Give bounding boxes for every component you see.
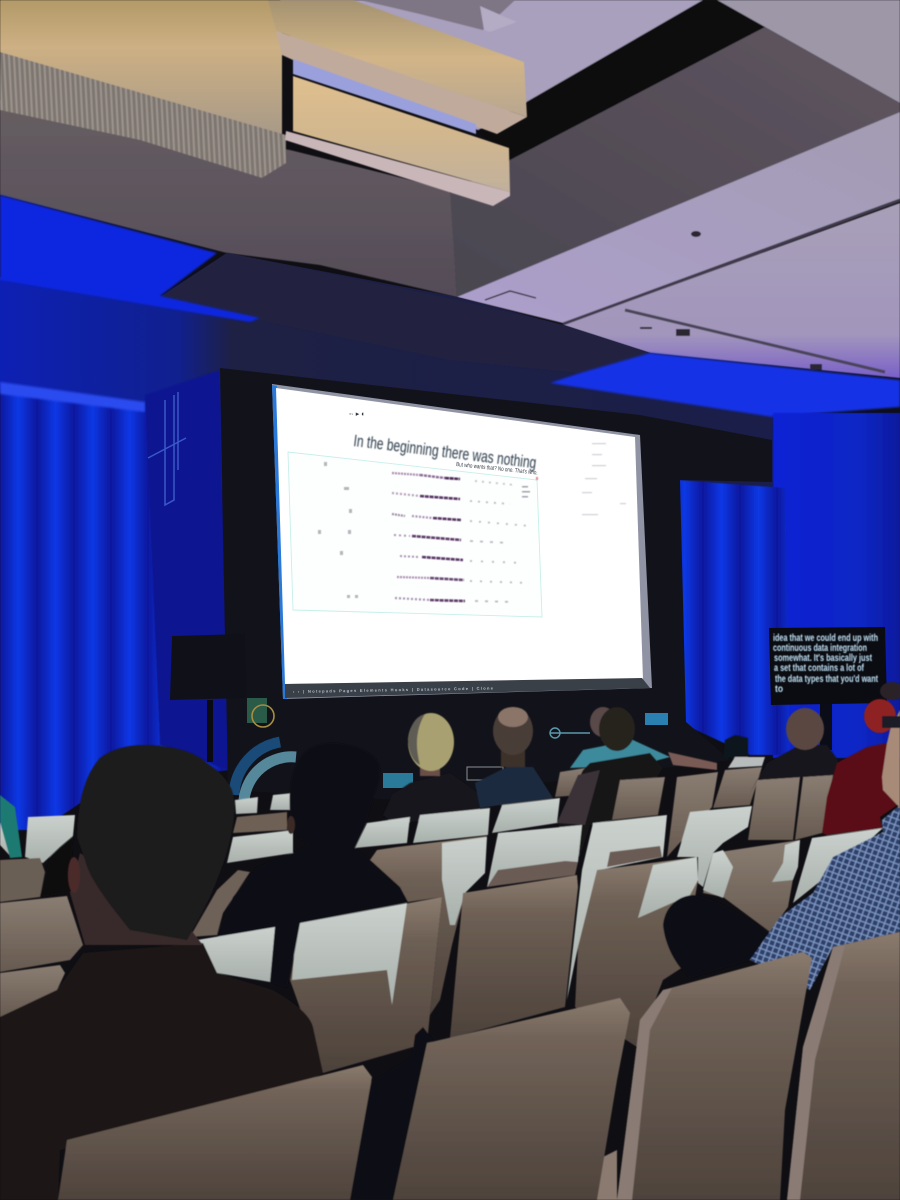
row 5 lit seats [0, 793, 560, 863]
person: dark vest [557, 707, 663, 857]
front seat 3 side highlight [617, 988, 672, 1200]
seat [413, 808, 490, 843]
slide subtitle: But who wants that? No one. That's who. [456, 462, 538, 477]
front seat 4 side highlight [787, 945, 845, 1200]
head [590, 707, 616, 737]
right column [773, 413, 900, 758]
head [290, 743, 380, 850]
backdrop graphic: line mark [148, 392, 186, 505]
person: blond [383, 713, 480, 825]
seat right [703, 840, 800, 932]
row 5 shaded seat [233, 812, 287, 833]
slide strip plot [318, 443, 626, 602]
backpack [350, 1027, 433, 1200]
front seat 1 [58, 1065, 372, 1200]
backdrop graphic: blue block [645, 713, 668, 725]
fixture: lower lip [285, 131, 510, 206]
speaker stand [207, 700, 213, 762]
fixture: hanger block [360, 0, 515, 30]
screen blue edge [272, 385, 287, 699]
seat [227, 830, 293, 863]
faint labels [592, 443, 606, 444]
ceiling: dark slanted panel [450, 27, 900, 297]
head [599, 707, 635, 751]
row 1 seats [58, 932, 900, 1200]
neck [420, 762, 440, 776]
legend [522, 486, 528, 488]
ceiling: lower panel [563, 203, 900, 378]
curtain body [0, 385, 228, 830]
body [822, 743, 900, 835]
right curtain and column [678, 413, 900, 758]
person: red jacket [822, 682, 900, 835]
seat lit [638, 857, 698, 918]
seat [355, 817, 410, 848]
dark blue panel [145, 370, 228, 770]
row 2 [392, 493, 510, 504]
dark chair far back [723, 735, 748, 758]
speaker [170, 634, 246, 762]
seat left [25, 815, 75, 863]
left edge person stripes [0, 795, 22, 858]
neck [501, 745, 525, 767]
light fitting [640, 327, 652, 329]
foreground man [0, 745, 323, 1200]
seat [713, 767, 762, 808]
dark wedge [160, 253, 650, 373]
teleprompter stand [820, 700, 832, 750]
small left dark person [40, 837, 73, 897]
row 4 [394, 535, 510, 543]
teal body [570, 740, 670, 768]
screen surface [276, 388, 643, 684]
ceiling: top light panel [280, 0, 703, 130]
front seat 2 [393, 998, 630, 1200]
floor patch [597, 1150, 617, 1200]
seat [795, 775, 833, 840]
projection screen [272, 384, 652, 699]
hair shadow [408, 714, 425, 765]
ceiling: track rail [625, 310, 885, 372]
left outlier dots [318, 462, 358, 598]
back row seats [555, 757, 833, 857]
screen bar labels: ‹ › | Notepads Pages Elements Hooks | Datasource Code | Clone [293, 685, 494, 694]
seat lit [292, 903, 407, 1005]
sleeve [557, 770, 600, 825]
screen bottom bar [285, 678, 650, 698]
right curtain [678, 480, 790, 755]
backdrop graphic: inner arc [244, 757, 296, 800]
bald head [493, 707, 533, 755]
seat [567, 815, 667, 1000]
right panel faint labels [582, 443, 626, 515]
seat [270, 793, 293, 810]
backdrop main [220, 368, 772, 800]
hair [864, 699, 896, 733]
row 6 [397, 577, 530, 583]
ceiling [0, 0, 900, 378]
face [882, 710, 900, 808]
fixture: top box [268, 0, 527, 117]
right side legend marks [522, 477, 538, 498]
row 7 [395, 598, 515, 602]
curtain rail glow [0, 382, 145, 412]
seat lit [197, 927, 275, 982]
seat [450, 875, 578, 1038]
fixture: blue window [293, 59, 476, 134]
stage backdrop [148, 368, 772, 800]
row 5 [400, 556, 525, 563]
seat [612, 777, 665, 820]
caption line 6: to [775, 683, 783, 695]
person: dark hair middle [217, 743, 408, 988]
seat [667, 772, 718, 857]
teleprompter [769, 627, 887, 750]
top head [880, 682, 900, 700]
person: behind, teal shirt [570, 707, 717, 770]
seat [555, 768, 585, 797]
body [217, 843, 408, 988]
slide small icons: ◦· ▸ ◐ [349, 411, 365, 418]
seat far [728, 757, 765, 768]
person: check shirt [663, 710, 900, 990]
audience and seating [0, 682, 900, 1200]
seat [487, 825, 582, 887]
seat [793, 828, 883, 903]
backdrop graphic: teal bar [383, 773, 413, 788]
seat right lit [772, 840, 800, 882]
light fitting [810, 364, 822, 370]
backdrop graphic: outer arc [234, 742, 280, 795]
row 3 seats [0, 857, 698, 1073]
seat [677, 806, 752, 887]
ceiling: light strip [457, 112, 900, 323]
person: bald in hoodie [475, 707, 553, 808]
ceiling: fittings [485, 231, 822, 370]
skin shadow near ear [68, 857, 80, 893]
teleprompter display [769, 627, 887, 705]
blue wash left [0, 195, 260, 322]
front seat 4 [787, 932, 900, 1200]
dot group [324, 462, 327, 466]
vest and sleeve [557, 753, 663, 857]
backdrop graphic: yellow ring [252, 705, 274, 727]
row 1 [392, 473, 515, 485]
chandelier fixture [0, 0, 527, 206]
vent marks [485, 291, 536, 300]
row 4 seats [0, 806, 883, 1015]
fixture: crystal strands [0, 52, 286, 178]
seat right lit edge [703, 850, 733, 898]
seat [370, 836, 487, 1015]
seat [235, 797, 258, 814]
seat [0, 965, 65, 1017]
blue wash right [550, 353, 900, 417]
head [786, 708, 824, 750]
seat edge [0, 822, 13, 858]
hoodie [475, 767, 553, 808]
caption line 4: a set that contains a lot of [774, 662, 864, 674]
seat [0, 896, 83, 972]
seat [492, 798, 560, 833]
ceiling: left soffit [0, 100, 457, 297]
fixture: hanger plate [480, 6, 517, 32]
glasses [882, 716, 900, 728]
fixture: lower box [293, 76, 510, 192]
backdrop graphic: outline box [467, 767, 503, 780]
teleprompter captions [773, 632, 878, 695]
backdrop graphic: green block [247, 698, 267, 723]
seat lit [442, 837, 487, 925]
check shirt [750, 805, 900, 990]
seat [748, 777, 800, 840]
graphic: line icon [148, 392, 186, 505]
row 3 [392, 514, 530, 526]
fixture: middle lip [276, 31, 527, 134]
neck [70, 853, 203, 945]
person: right far [750, 708, 838, 793]
seat left [0, 858, 45, 902]
seat lower [607, 846, 662, 867]
body [750, 745, 838, 793]
sprinkler [691, 231, 701, 237]
slide chart frame [288, 452, 542, 617]
front seat 3 [617, 952, 812, 1200]
scalp highlight [498, 707, 528, 727]
ceiling: black recess strip [478, 0, 765, 160]
seat [575, 857, 698, 1047]
upper wall band [0, 253, 773, 490]
seat [190, 870, 250, 937]
head [77, 745, 234, 940]
body [0, 943, 323, 1200]
ceiling: top right panel [717, 0, 900, 103]
left curtain [0, 370, 228, 830]
speaker box [170, 634, 246, 700]
fixture: left upper block [0, 0, 282, 135]
seat lower [487, 861, 578, 887]
ceiling: dark rail [563, 200, 900, 324]
light fitting [676, 329, 690, 336]
body [383, 773, 480, 825]
hair [408, 713, 454, 771]
dark legs [663, 895, 770, 978]
seat [290, 897, 442, 1073]
arm [668, 752, 717, 770]
screen frame [272, 384, 652, 699]
slide title: In the beginning there was nothing [353, 431, 537, 472]
backdrop graphic: line and circle [550, 728, 590, 738]
ear [287, 816, 295, 834]
